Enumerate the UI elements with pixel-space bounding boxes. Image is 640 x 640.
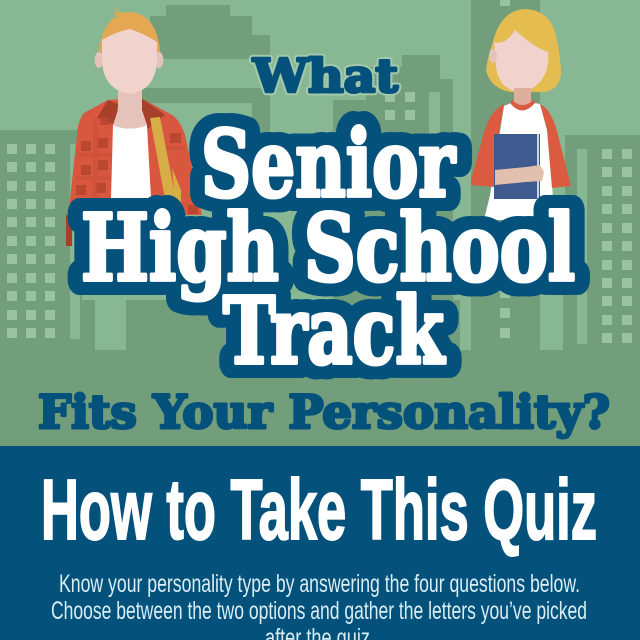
title: What: What <box>252 49 399 103</box>
hair <box>486 9 561 92</box>
hair back <box>98 6 161 60</box>
panel: how to take this quiz <box>0 446 640 640</box>
outline layer: Senior <box>196 110 451 218</box>
title: What: What <box>252 49 399 103</box>
outline layer: Track <box>228 277 451 385</box>
illustration: girl student <box>471 9 571 220</box>
outline layer: Senior <box>206 110 461 218</box>
white lettering: Senior <box>201 110 456 218</box>
white tee <box>111 125 151 198</box>
outline layer: Track <box>218 277 441 385</box>
white lettering: Track <box>223 277 446 385</box>
plaid bands <box>76 118 185 198</box>
dress <box>484 103 560 220</box>
panel: green city background <box>0 0 640 446</box>
windows: centre buildings <box>385 0 510 338</box>
title: Fits Your Personality?: Fits Your Personality? <box>38 385 610 439</box>
neck <box>514 88 531 110</box>
head <box>102 29 157 94</box>
illustration: boy student <box>66 6 202 246</box>
neck <box>113 90 147 128</box>
plaid squares <box>76 117 198 214</box>
sleeves <box>471 104 571 188</box>
outline layer <box>76 110 580 385</box>
flannel shirt <box>70 98 202 215</box>
windows: right building <box>602 149 632 343</box>
ears <box>94 52 104 68</box>
instructions text <box>51 570 587 640</box>
arm <box>495 165 544 185</box>
book <box>494 134 540 199</box>
backpack strap <box>150 117 181 215</box>
collar <box>510 100 535 110</box>
tower strips <box>70 92 587 350</box>
head <box>494 30 548 92</box>
title: Senior High School Track <box>76 110 580 385</box>
white lettering <box>81 110 575 385</box>
windows: left building <box>7 144 55 338</box>
